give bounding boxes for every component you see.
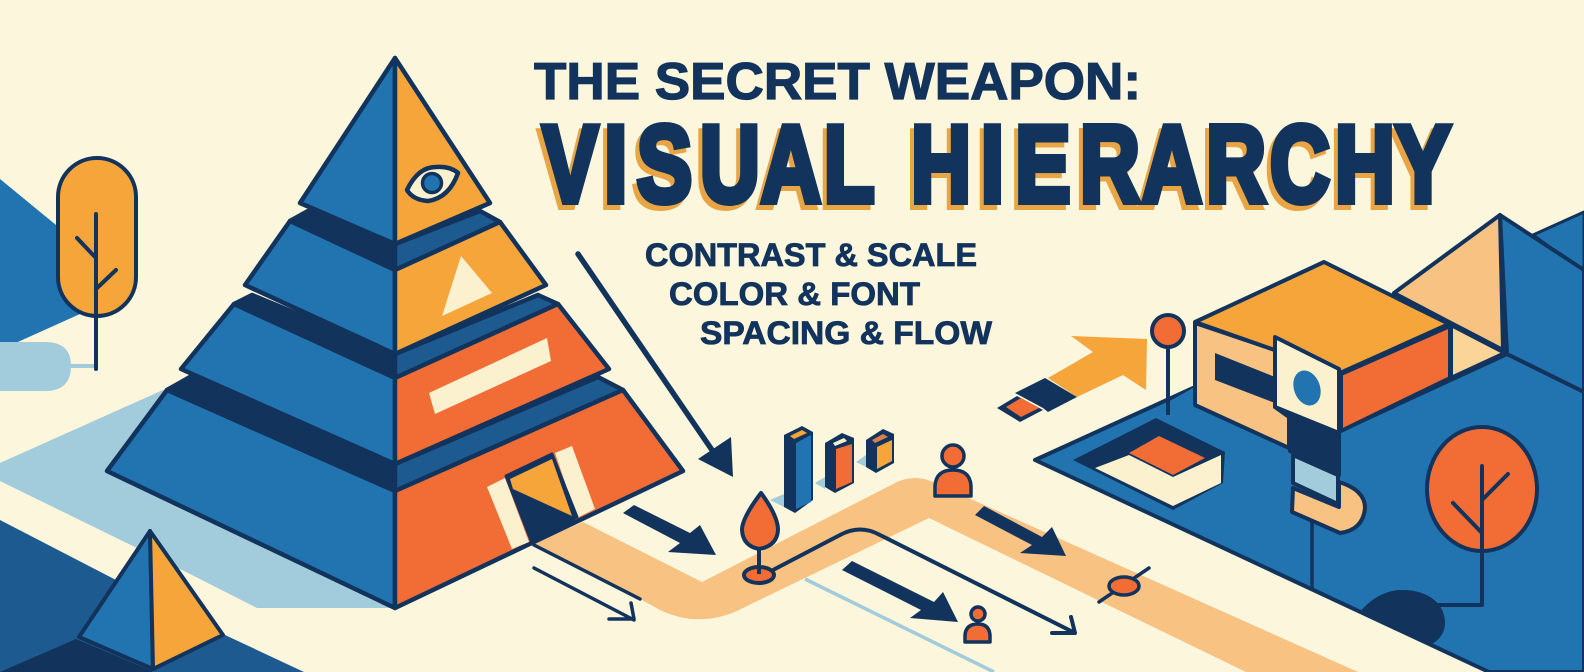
orange bar: [825, 433, 854, 493]
tree: orange capsule: [58, 158, 136, 369]
title line 1: THE SECRET WEAPON:: [534, 53, 1141, 111]
person icon 1: [935, 445, 971, 496]
bar shadows: [770, 455, 866, 507]
box right face: [1341, 326, 1450, 431]
band behind tier 3: [234, 295, 558, 378]
tier 2: [245, 221, 546, 354]
path node: [1099, 568, 1149, 602]
box top: [1195, 262, 1449, 373]
peach flow path: [530, 478, 1358, 672]
person icon 2: [965, 607, 990, 642]
thick arrow 1: [623, 505, 716, 555]
light blue capsule shadow with connector: [0, 342, 96, 391]
cream bar: [429, 338, 551, 414]
ground edge behind box: [1340, 354, 1507, 431]
blue bar: [784, 426, 813, 513]
peach mountain: [1394, 215, 1505, 378]
flag panel: [1275, 337, 1339, 433]
tier 1: apex: [300, 58, 490, 244]
box left face: [1195, 323, 1289, 448]
bottom left dark hills: [0, 520, 304, 672]
cream triangle: [442, 256, 492, 316]
blue ground and right hills: [1035, 212, 1584, 672]
band behind tier 2: [290, 211, 500, 270]
isometric box: [1195, 262, 1450, 533]
tier 4: [107, 390, 683, 608]
orange arrow marker: [997, 336, 1147, 422]
ground shadow blob: [1360, 590, 1445, 645]
orange tree on ground: [1427, 427, 1537, 605]
flag dot: [1289, 367, 1325, 409]
dark bar: [1215, 353, 1275, 403]
title line 2: VISUAL HIERARCHY: [543, 102, 1451, 225]
door: [487, 446, 595, 549]
subtitle list: [645, 237, 993, 351]
small pyramid: [79, 531, 223, 669]
thick arrow 3: [975, 506, 1066, 556]
icon: eye: [407, 167, 458, 201]
left hill: [0, 179, 80, 350]
inset box: [1073, 418, 1225, 510]
long diagonal arrow: [578, 254, 733, 477]
subtitle list: SPACING & FLOW: [700, 315, 993, 351]
map pin: [742, 493, 778, 583]
band behind tier 4: [167, 377, 623, 491]
light blue diagonal line: [805, 579, 994, 672]
blue ground in front of box: [1100, 355, 1506, 560]
tier 3: [181, 304, 609, 464]
yellow bar: [866, 429, 894, 473]
thin lines and arrows: [534, 530, 1075, 633]
subtitle list: COLOR & FONT: [669, 276, 920, 312]
column stem: [1310, 522, 1314, 590]
subtitle list: CONTRAST & SCALE: [645, 237, 977, 273]
light blue ground: [0, 390, 395, 608]
pin: [1152, 315, 1184, 415]
bar chart: [770, 426, 894, 513]
column: [1290, 417, 1365, 533]
thick arrow 2: [842, 561, 958, 622]
main pyramid: [107, 58, 683, 608]
